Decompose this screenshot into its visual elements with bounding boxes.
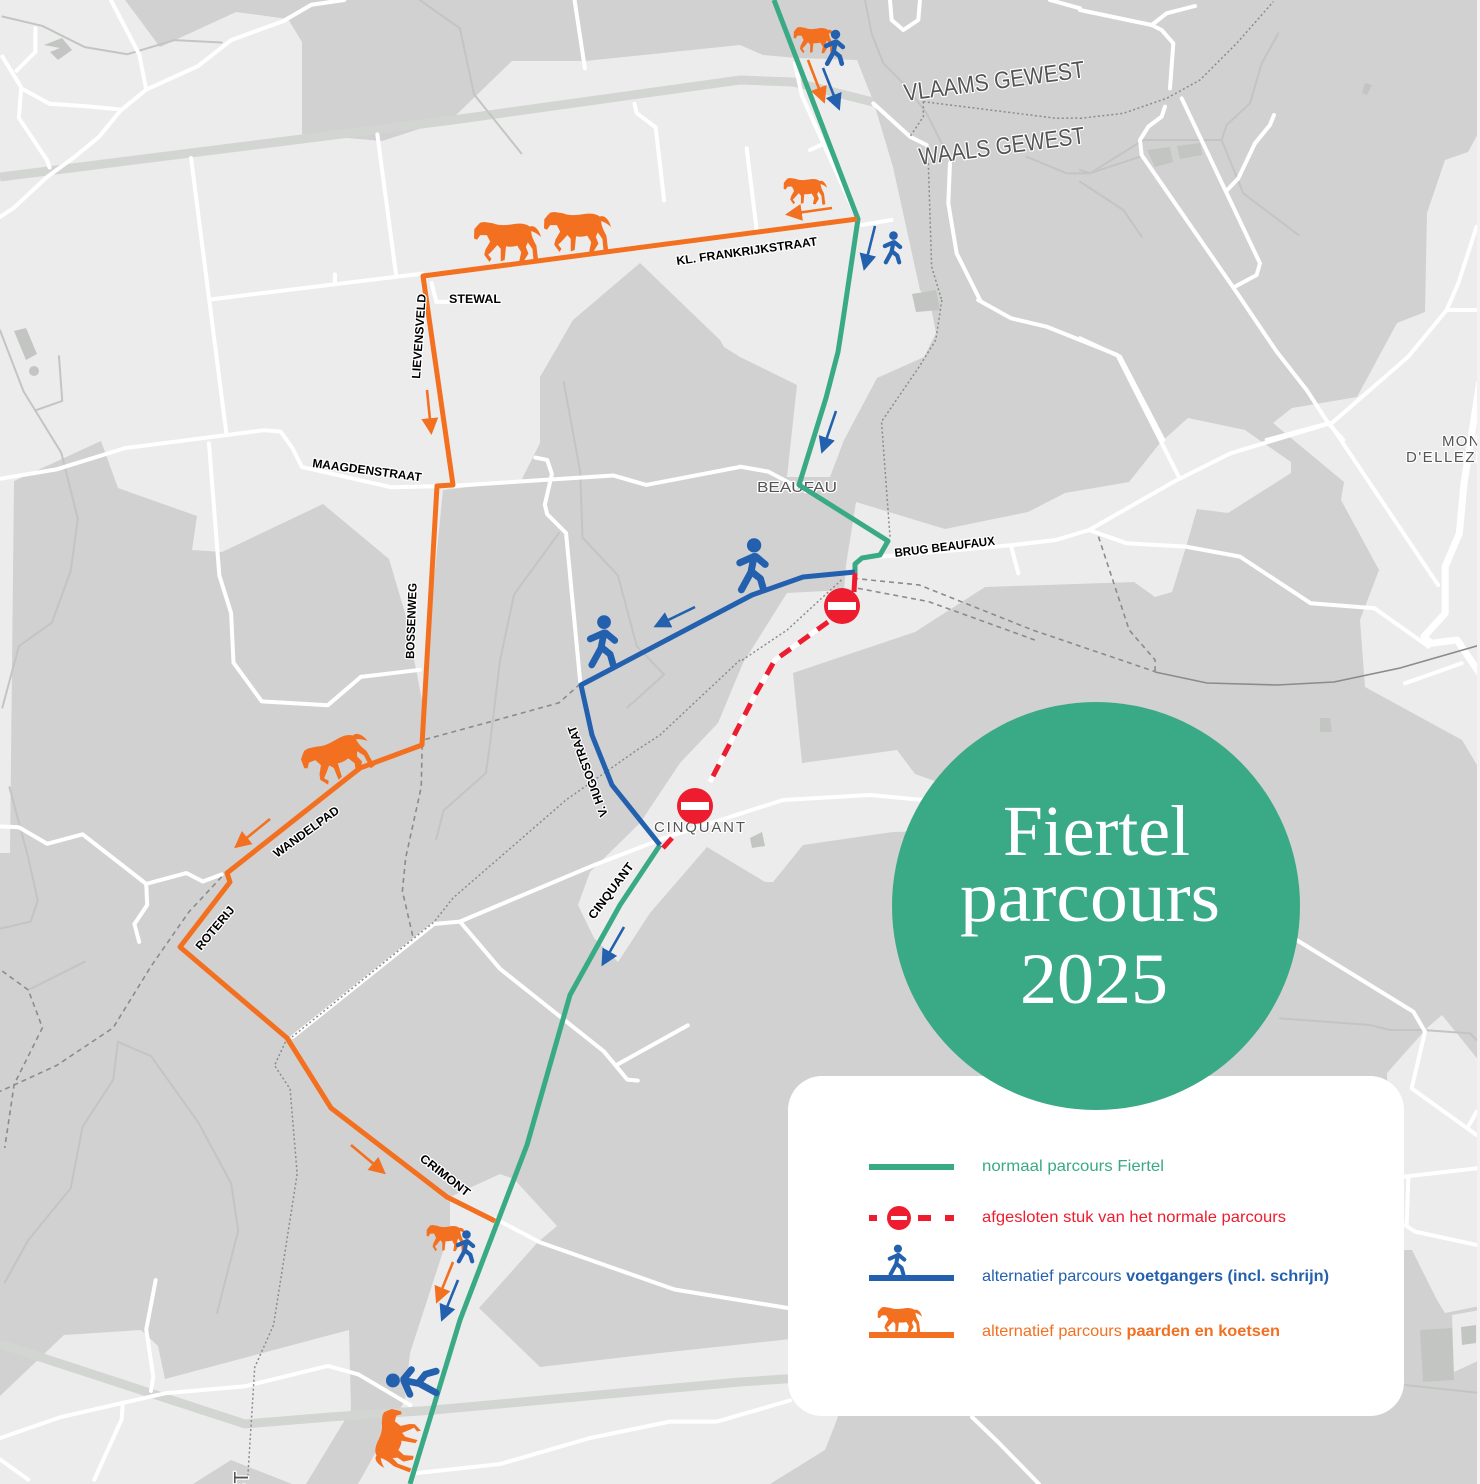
icons: walkers bbox=[387, 30, 900, 1394]
icon: horse on street left bbox=[474, 222, 541, 263]
legend text: horse route: alternatief parcours paarden en koetsen bbox=[982, 1323, 1280, 1340]
arrow: orange top bbox=[808, 60, 823, 99]
arrow: orange lievensveld bbox=[427, 390, 431, 430]
icon: horse bottom bbox=[369, 1407, 425, 1475]
arrow: blue street bbox=[658, 607, 695, 625]
label: Vlaams Gewest: VLAAMS GEWEST bbox=[902, 56, 1087, 107]
legend text: normal route: normaal parcours Fiertel bbox=[982, 1158, 1164, 1175]
arrow: blue top bbox=[823, 68, 838, 106]
page right edge bbox=[1477, 0, 1480, 1484]
icon: walker top bbox=[826, 30, 843, 64]
legend text: pedestrian route: alternatief parcours voetgangers (incl. schrijn) bbox=[982, 1268, 1329, 1285]
legend symbol: pedestrian route bbox=[869, 1245, 954, 1281]
label: Beaufau: BEAUFAU bbox=[757, 479, 837, 496]
icon: horse crimont bbox=[427, 1225, 466, 1252]
label: V. Hugostraat: V. HUGOSTRAAT bbox=[565, 723, 611, 819]
icon: walker large bbox=[740, 539, 765, 590]
icon: walker on street bbox=[590, 616, 615, 665]
arrows: direction bbox=[238, 60, 875, 1317]
label: Maagdenstraat: MAAGDENSTRAAT bbox=[312, 456, 423, 484]
title text: parcours: parcours bbox=[960, 857, 1220, 937]
arrow: blue cinquant bbox=[604, 927, 624, 962]
label: Bossenweg: BOSSENWEG bbox=[403, 583, 420, 659]
legend panel bbox=[788, 1076, 1404, 1416]
label: Cinquant village: CINQUANT bbox=[654, 819, 745, 836]
label: Cinquant street: CINQUANT bbox=[585, 859, 637, 922]
label: Lievensveld: LIEVENSVELD bbox=[409, 293, 429, 379]
legend line: normal route bbox=[869, 1164, 954, 1170]
railway and boundary dashed lines bbox=[0, 537, 1480, 1148]
icon: horse wandelpad bbox=[298, 727, 378, 791]
arrow: orange junction bbox=[790, 208, 832, 214]
arrow: orange crimont bbox=[351, 1145, 382, 1171]
arrow: blue south bbox=[443, 1280, 458, 1317]
region labels bbox=[654, 56, 1480, 836]
icon: no entry upper bbox=[824, 588, 860, 624]
dotted paths and region border bbox=[248, 2, 1273, 1480]
icon: horse top bbox=[794, 27, 835, 54]
arrow: blue junction bbox=[865, 226, 875, 266]
route: pedestrian alternative bbox=[581, 572, 855, 845]
title text: Fiertel: Fiertel bbox=[1003, 791, 1190, 871]
route: horses alternative bbox=[180, 219, 857, 1221]
icon: no entry lower bbox=[677, 788, 713, 824]
icon: walker right of route bbox=[885, 232, 900, 262]
legend text: closed section: afgesloten stuk van het normale parcours bbox=[982, 1209, 1286, 1226]
route: normal Fiertel upper section bbox=[774, 0, 888, 573]
icon: horse near junction bbox=[784, 178, 827, 205]
label: Waals Gewest: WAALS GEWEST bbox=[917, 122, 1087, 171]
route: normal Fiertel lower section bbox=[410, 845, 660, 1484]
label: Brug Beaufaux: BRUG BEAUFAUX bbox=[894, 534, 996, 560]
label: Kl. Frankrijkstraat: KL. FRANKRIJKSTRAAT bbox=[675, 234, 819, 268]
icons: horses bbox=[298, 27, 835, 1475]
label: Roterij: ROTERIJ bbox=[193, 903, 237, 953]
arrow: blue beaufau bbox=[823, 411, 836, 449]
closed section of route bbox=[663, 573, 855, 848]
label: Crimont: CRIMONT bbox=[417, 1151, 474, 1200]
legend symbol: horse route bbox=[869, 1307, 954, 1338]
icon: walker bottom rotated bbox=[387, 1370, 436, 1394]
label: Wandelpad: WANDELPAD bbox=[271, 803, 342, 860]
icon: horse on street right bbox=[544, 212, 611, 253]
icon: walker crimont bbox=[458, 1231, 473, 1261]
arrow: orange wandelpad bbox=[238, 819, 270, 845]
title text: 2025: 2025 bbox=[1020, 939, 1168, 1019]
arrow: orange south bbox=[438, 1262, 453, 1299]
street labels bbox=[193, 234, 996, 1200]
highways bbox=[0, 80, 873, 1424]
legend symbol: closed section bbox=[869, 1206, 954, 1230]
title circle bbox=[892, 702, 1300, 1110]
label: Stewal: STEWAL bbox=[449, 292, 501, 306]
